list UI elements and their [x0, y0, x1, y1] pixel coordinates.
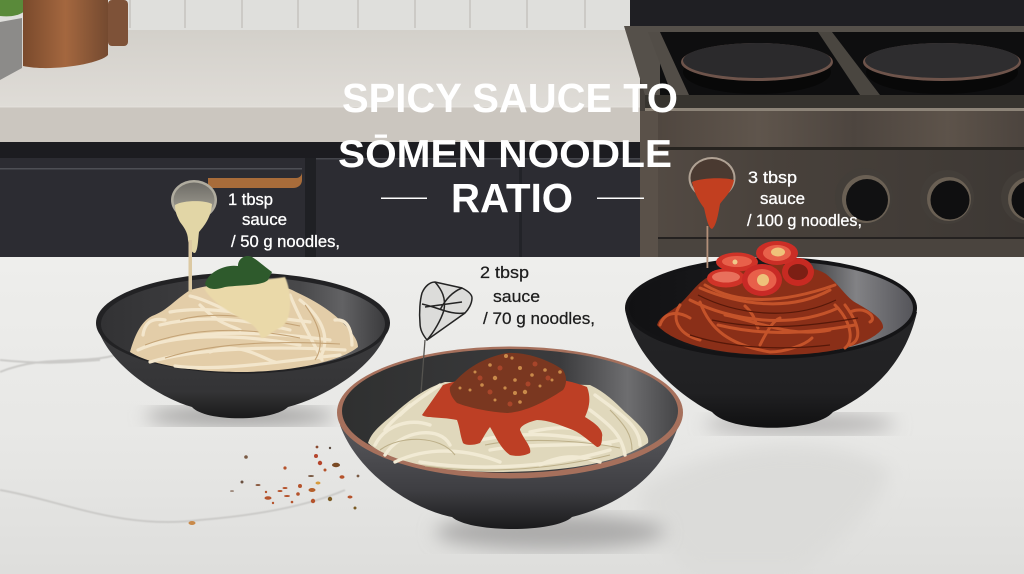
background: upper countertop [0, 30, 645, 142]
label: 3 tbsp: / 100 g noodles, [747, 212, 862, 230]
noodles: pale [130, 283, 358, 372]
sauce: red [422, 375, 602, 456]
sauce: pale dollop [204, 277, 290, 338]
noodles: red [657, 264, 883, 355]
title [338, 75, 678, 221]
icon: basil leaves [205, 256, 272, 289]
label: 1 tbsp [228, 191, 340, 251]
label: 1 tbsp: / 50 g noodles, [231, 233, 340, 251]
icon: copper handle [208, 172, 302, 188]
label: 2 tbsp: sauce [493, 287, 540, 306]
label: 2 tbsp: / 70 g noodles, [483, 309, 595, 328]
background: stove [624, 0, 1024, 258]
icon: left pouring cup [171, 180, 217, 292]
label: 3 tbsp: 3 tbsp [748, 169, 797, 187]
background: kitchen wall [0, 0, 640, 30]
background: dark cabinets [0, 142, 645, 258]
decor: canisters at top left [0, 0, 128, 80]
bowl: right bowl with red noodles [625, 241, 917, 428]
icon: pan left [681, 43, 833, 94]
title: RATIO [451, 175, 573, 221]
label: 3 tbsp: sauce [760, 190, 805, 208]
icon: outlined sketch cup [420, 282, 472, 393]
title: SPICY SAUCE TO [342, 75, 678, 121]
title: SŌMEN NOODLE [338, 133, 672, 176]
label: 2 tbsp [480, 263, 595, 328]
label: 1 tbsp: sauce [242, 211, 287, 229]
background: marble counter [0, 257, 1024, 574]
bowl: middle bowl with chili sauce [337, 346, 683, 529]
topping: chili flakes [450, 353, 566, 413]
topping: chili slices [707, 241, 814, 296]
bowl: left bowl with pale sauce [96, 256, 390, 418]
icon: pan right [863, 43, 1021, 94]
noodles: plain [368, 382, 648, 472]
scatter: chili flakes [188, 446, 359, 525]
icon: right pouring cup [688, 157, 736, 268]
icon: knobs [835, 168, 1024, 226]
label: 2 tbsp: 2 tbsp [480, 263, 529, 282]
label: 1 tbsp: 1 tbsp [228, 191, 273, 209]
label: 3 tbsp [747, 169, 862, 230]
